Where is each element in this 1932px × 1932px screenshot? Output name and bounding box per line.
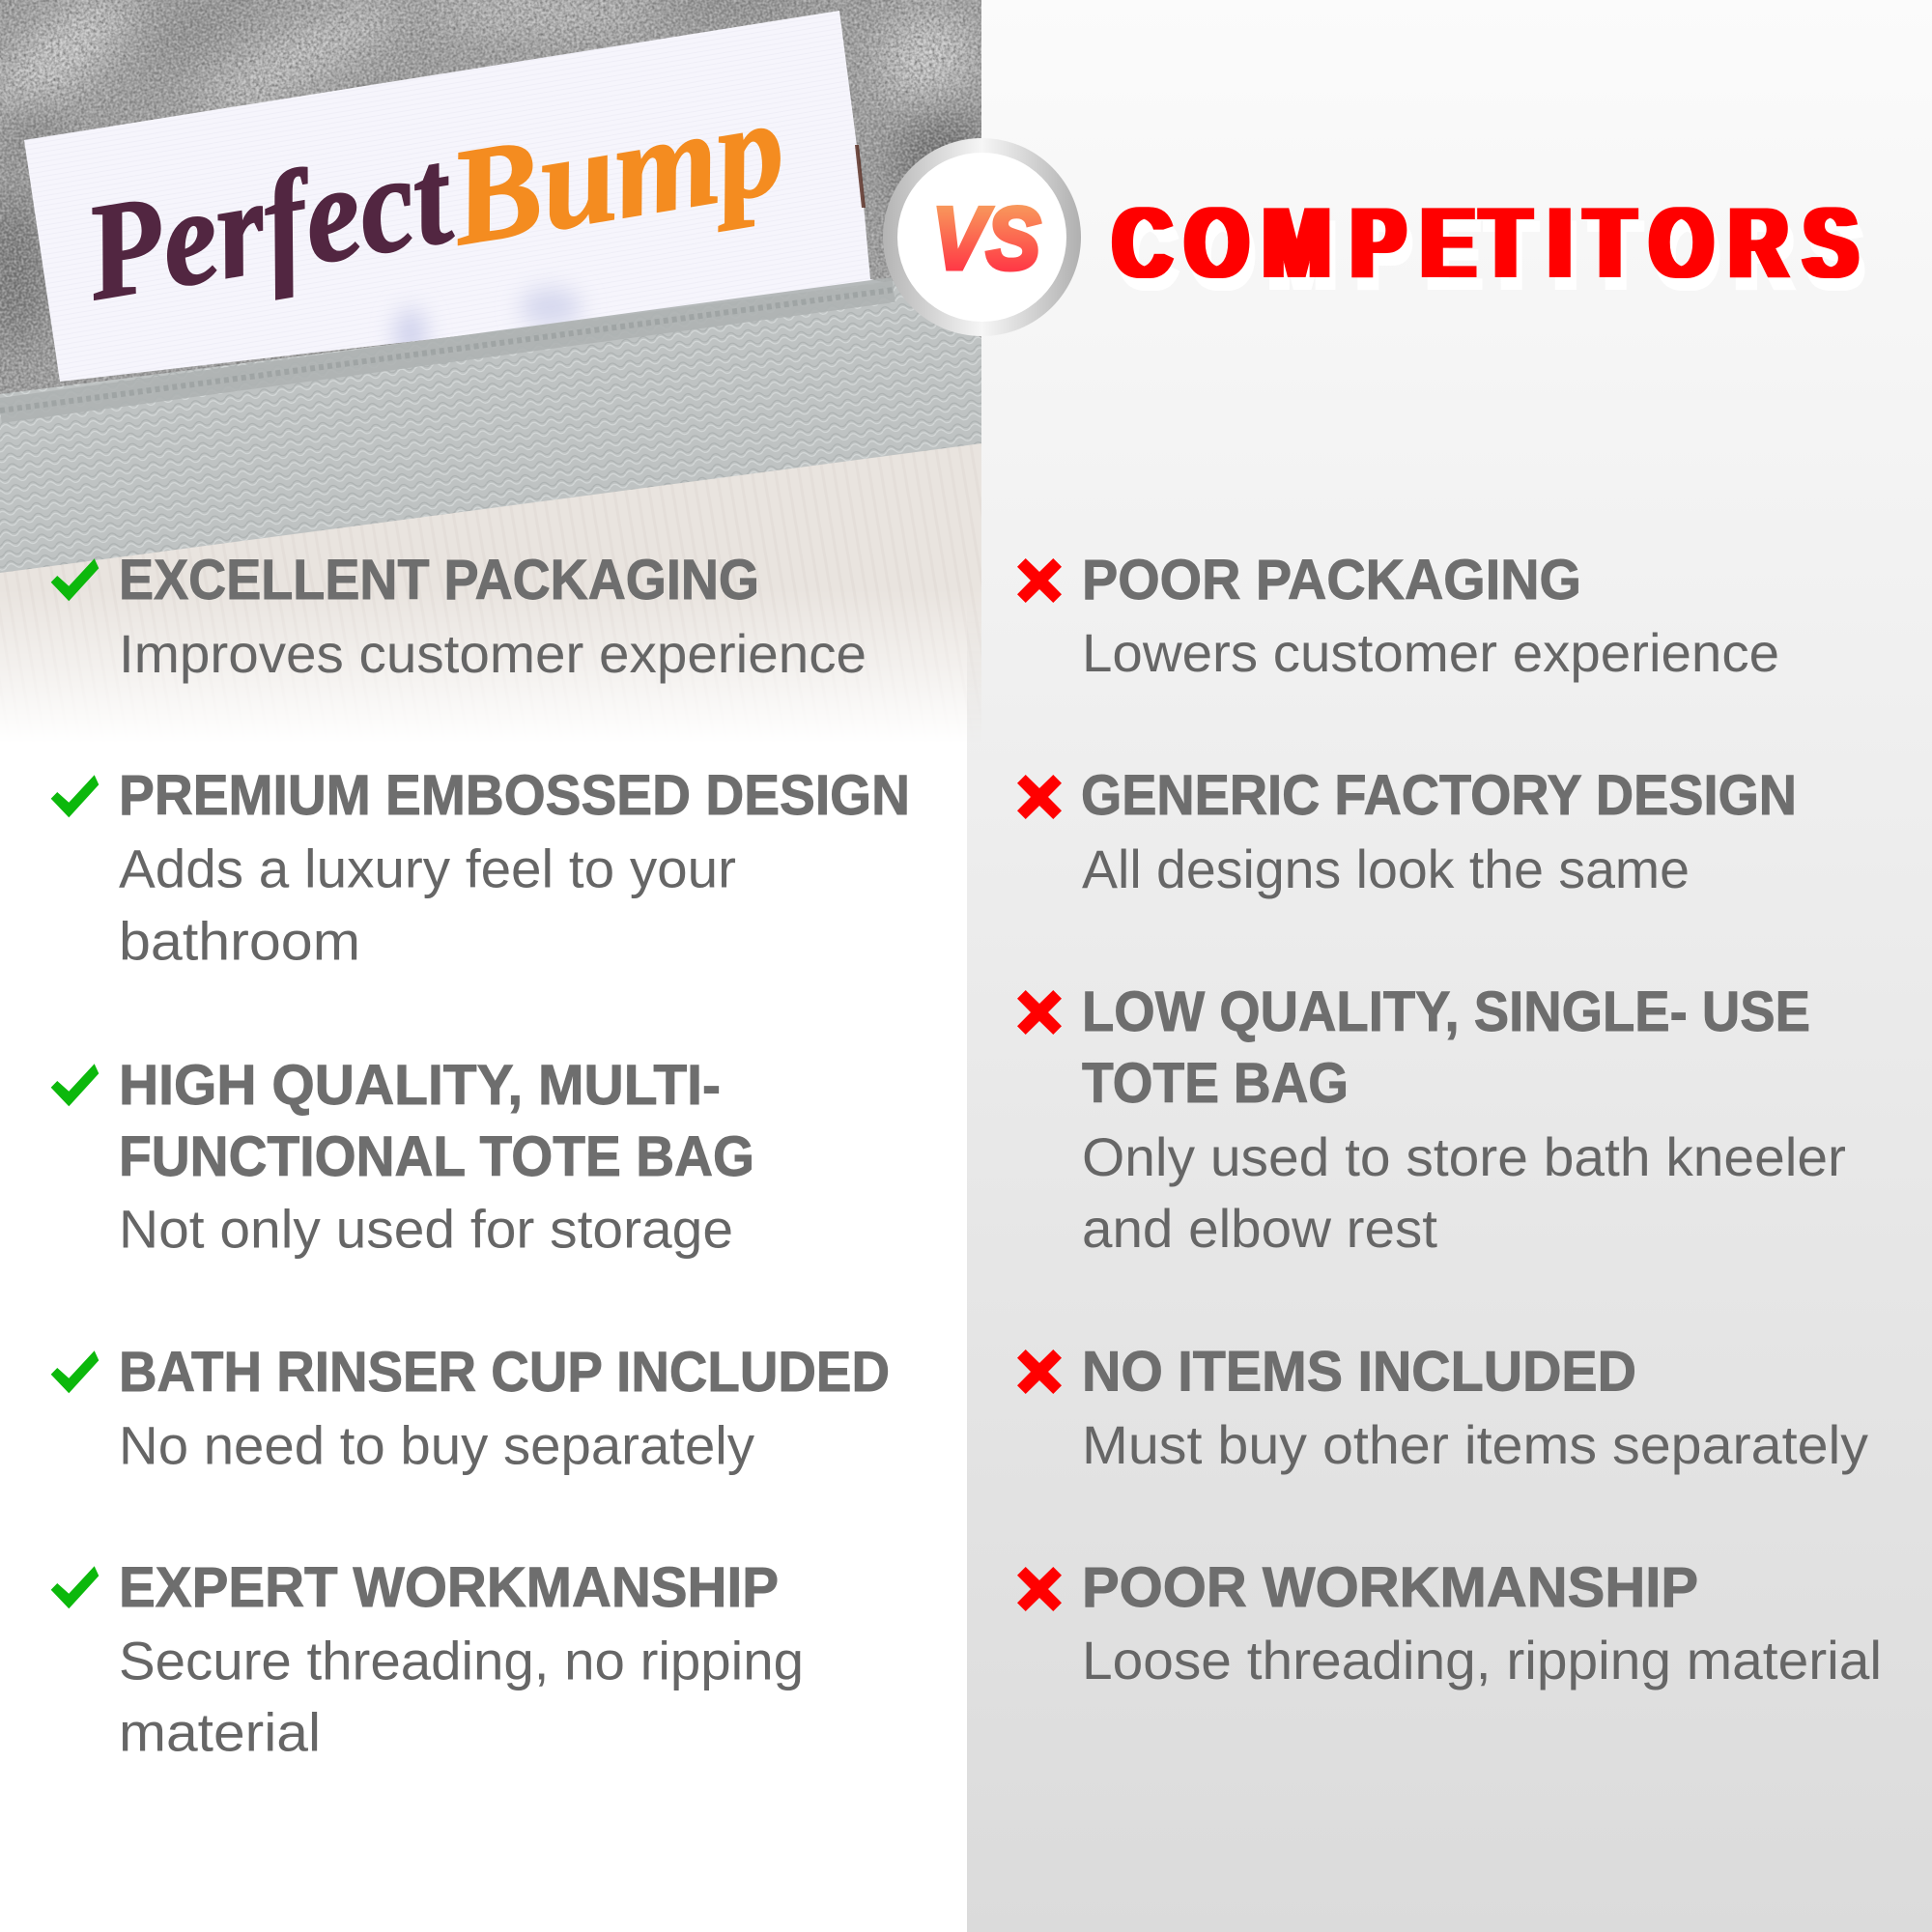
woven white tag xyxy=(24,11,899,382)
heading: BATH RINSER CUP INCLUDED xyxy=(119,1341,890,1404)
panel: competitor drawbacks xyxy=(1017,549,1882,1690)
description: Adds a luxury feel to your xyxy=(119,838,736,898)
item: expert workmanship xyxy=(51,1556,804,1762)
beige ribbed fabric xyxy=(0,443,981,711)
description: Improves customer experience xyxy=(119,623,867,684)
icon: red cross xyxy=(1017,558,1062,603)
title: COMPETITORS: COMPETITORS xyxy=(1113,186,1858,298)
logo word: Perfect: Perfect xyxy=(73,118,463,329)
heading: GENERIC FACTORY DESIGN xyxy=(1081,764,1797,827)
item: excellent packaging xyxy=(51,549,867,684)
heading: EXPERT WORKMANSHIP xyxy=(119,1556,779,1619)
logo word: Bump: Bump xyxy=(438,69,794,274)
icon: green check xyxy=(51,1566,99,1608)
description: Not only used for storage xyxy=(119,1198,733,1260)
heading: POOR PACKAGING xyxy=(1082,549,1581,611)
description: bathroom xyxy=(119,910,360,972)
description: Lowers customer experience xyxy=(1082,622,1779,683)
heading: TOTE BAG xyxy=(1082,1052,1349,1115)
item: generic factory design xyxy=(1017,764,1797,899)
VS badge xyxy=(883,138,1081,336)
icon: red cross xyxy=(1017,990,1062,1035)
panel: Perfect Bump benefits xyxy=(51,549,910,1762)
description xyxy=(1082,1126,1846,1259)
heading xyxy=(119,1054,754,1188)
description: material xyxy=(119,1702,321,1762)
description: and elbow rest xyxy=(1082,1198,1437,1259)
icon: green check xyxy=(51,558,99,601)
heading: FUNCTIONAL TOTE BAG xyxy=(119,1125,754,1188)
heading: HIGH QUALITY, MULTI- xyxy=(119,1054,721,1117)
icon: red cross xyxy=(1017,1350,1062,1394)
item: bath rinser cup xyxy=(51,1341,890,1476)
heading xyxy=(1082,980,1810,1115)
item: high quality tote bag xyxy=(51,1054,754,1260)
photo: Perfect Bump embroidered tag on grey fabric xyxy=(0,0,991,773)
description: Loose threading, ripping material xyxy=(1082,1630,1882,1690)
icon: green check xyxy=(51,775,99,817)
panel: competitors background xyxy=(967,0,1932,1932)
VS letters: VS xyxy=(932,190,1040,288)
heading: EXCELLENT PACKAGING xyxy=(119,549,759,611)
description: All designs look the same xyxy=(1082,838,1690,899)
description: Secure threading, no ripping xyxy=(119,1631,804,1690)
grey waffle fabric fold xyxy=(0,280,981,573)
item: poor workmanship xyxy=(1017,1556,1882,1690)
item: no items included xyxy=(1017,1341,1868,1475)
icon: red cross xyxy=(1017,1567,1062,1611)
heading: LOW QUALITY, SINGLE- USE xyxy=(1082,980,1810,1043)
icon: red cross xyxy=(1017,775,1062,819)
item: low quality tote bag xyxy=(1017,980,1846,1259)
description: Must buy other items separately xyxy=(1082,1414,1868,1475)
item: poor packaging xyxy=(1017,549,1779,683)
grey knit fabric xyxy=(0,0,981,394)
icon: green check xyxy=(51,1350,99,1393)
description: Only used to store bath kneeler xyxy=(1082,1126,1846,1187)
description: No need to buy separately xyxy=(119,1414,754,1476)
heading: NO ITEMS INCLUDED xyxy=(1082,1341,1636,1403)
description xyxy=(119,1631,804,1762)
heading: PREMIUM EMBOSSED DESIGN xyxy=(119,764,910,827)
item: premium embossed design xyxy=(51,764,910,972)
title: COMPETITORS: COMPETITORS xyxy=(1119,199,1863,311)
icon: green check xyxy=(51,1064,99,1106)
description xyxy=(119,838,736,972)
heading: POOR WORKMANSHIP xyxy=(1082,1556,1698,1619)
